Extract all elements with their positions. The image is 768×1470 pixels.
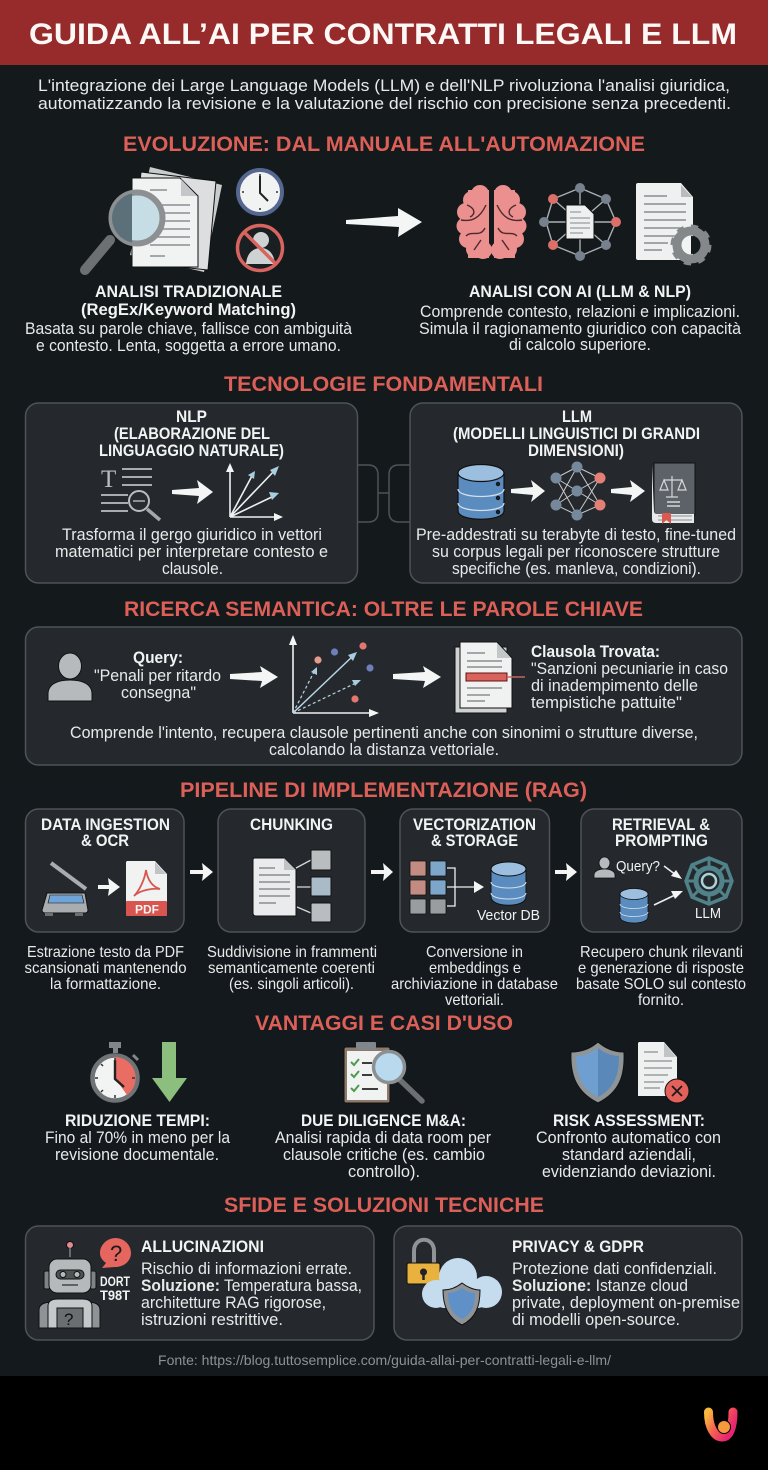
heading: sfide: SFIDE E SOLUZIONI TECNICHE	[224, 1193, 544, 1217]
text block: risk assessment: Confronto automatico con	[536, 1128, 721, 1147]
pipeline step: data ingestion	[26, 809, 184, 932]
arrow	[172, 480, 213, 504]
NLP description	[55, 525, 328, 578]
description: step 4: basate SOLO sul contesto	[576, 976, 746, 993]
privacy text	[512, 1259, 740, 1329]
LLM title	[453, 408, 700, 460]
clause text: di inadempimento delle	[531, 676, 698, 695]
arrow	[98, 878, 120, 896]
text block: riduzione tempi: RIDUZIONE TEMPI:	[65, 1112, 210, 1130]
text block: analisi tradizionale: e contesto. Lenta, soggetta a errore umano.	[36, 336, 341, 355]
step title	[413, 816, 536, 850]
description: step 3: archiviazione in database	[391, 976, 558, 993]
allucinazioni title: ALLUCINAZIONI	[141, 1238, 264, 1256]
footer band	[0, 1376, 768, 1470]
icon: text with magnifier: T	[101, 466, 116, 493]
icon: document with error	[638, 1042, 689, 1103]
text block: risk assessment: evidenziando deviazioni.	[542, 1162, 716, 1181]
step title: DATA INGESTION	[41, 816, 170, 834]
icon: vector axes	[226, 463, 283, 521]
description: step 4: fornito.	[638, 992, 684, 1009]
heading: ricerca semantica: RICERCA SEMANTICA: OLTRE LE PAROLE CHIAVE	[124, 597, 643, 621]
icon: scanner	[42, 863, 88, 916]
NLP title	[99, 408, 284, 460]
chart: vector space	[289, 635, 379, 717]
icon: question bubble	[100, 1238, 131, 1268]
pipeline step: retrieval	[581, 809, 742, 932]
LLM title: DIMENSIONI)	[528, 442, 624, 460]
NLP title: NLP	[176, 408, 207, 426]
logo	[708, 1412, 733, 1437]
step title	[41, 816, 170, 850]
description: step 1: Estrazione testo da PDF	[27, 944, 184, 961]
query text: "Penali per ritardo	[94, 666, 221, 685]
text block: analisi con AI: Comprende contesto, relazioni e implicazioni.	[420, 302, 740, 321]
text block: risk assessment: RISK ASSESSMENT:	[553, 1112, 705, 1130]
text block: analisi tradizionale: Basata su parole chiave, fallisce con ambiguità	[25, 319, 352, 338]
icon: PDF file: PDF	[135, 904, 159, 916]
panel: allucinazioni	[26, 1226, 374, 1340]
source line: Fonte: https://blog.tuttosemplice.com/guida-allai-per-contratti-legali-e-llm/	[158, 1352, 611, 1368]
text block: analisi con AI: ANALISI CON AI (LLM & NLP)	[469, 283, 691, 301]
panel: ricerca semantica	[26, 627, 742, 765]
LLM title: LLM	[562, 408, 592, 426]
icon: database	[458, 464, 504, 519]
icon: law book	[652, 463, 695, 524]
NLP title: (ELABORAZIONE DEL	[114, 425, 270, 443]
icon: document network	[539, 183, 621, 261]
heading: vantaggi: VANTAGGI E CASI D'USO	[255, 1011, 513, 1035]
LLM description: specifiche (es. manleva, condizioni).	[452, 559, 701, 578]
icon: padlock	[407, 1240, 440, 1284]
NLP description: clausole.	[162, 559, 223, 578]
header band	[0, 0, 768, 65]
icon: shield	[571, 1042, 624, 1103]
connector between panels	[357, 465, 410, 522]
text block: due diligence: Analisi rapida di data room per	[275, 1128, 491, 1147]
description: step 3: vettoriali.	[445, 992, 504, 1009]
label: LLM: LLM	[695, 906, 721, 922]
garbled label: T98T	[100, 1288, 131, 1303]
icon: robot: ?	[64, 1310, 73, 1329]
text block: analisi con AI	[419, 283, 742, 354]
connector arrow	[447, 868, 484, 906]
LLM description	[416, 525, 736, 578]
icon: brain	[456, 185, 526, 259]
label: vector db: Vector DB	[477, 907, 540, 924]
icon: embedding grid	[410, 861, 446, 914]
text block: riduzione tempi: revisione documentale.	[55, 1145, 219, 1164]
title: GUIDA ALL’AI PER CONTRATTI LEGALI E LLM	[29, 18, 737, 51]
text block: due diligence	[275, 1112, 491, 1181]
description: step 2	[207, 944, 377, 993]
arrow	[511, 480, 545, 502]
privacy text: private, deployment on-premise	[512, 1293, 740, 1312]
description: step 4	[576, 944, 746, 1009]
heading: evoluzione: EVOLUZIONE: DAL MANUALE ALL'AUTOMAZIONE	[123, 132, 645, 156]
arrow	[393, 666, 441, 688]
NLP description: Trasforma il gergo giuridico in vettori	[62, 525, 322, 544]
text block: due diligence: clausole critiche (es. cambio	[283, 1145, 485, 1164]
text block: analisi con AI: di calcolo superiore.	[509, 335, 651, 354]
icon: vector database	[491, 862, 526, 905]
icon: document with gear	[636, 183, 709, 263]
icon: clipboard with magnifier	[344, 1042, 422, 1103]
description: step 4: Recupero chunk rilevanti	[580, 944, 743, 961]
description: step 1: la formattazione.	[50, 976, 161, 993]
clause text: Clausola Trovata:	[531, 643, 660, 661]
intro text: L'integrazione dei Large Language Models (LLM) e dell'NLP rivoluziona l'analisi giuridica,	[38, 76, 730, 95]
icon: small database	[620, 888, 648, 923]
icon: LLM network	[686, 858, 732, 904]
heading: pipeline: PIPELINE DI IMPLEMENTAZIONE (RAG)	[180, 778, 587, 802]
clause text	[531, 643, 728, 712]
panel: LLM	[410, 403, 742, 583]
privacy text: di modelli open-source.	[512, 1310, 680, 1329]
step title: RETRIEVAL &	[612, 816, 710, 834]
privacy text: Soluzione: Istanze cloud	[512, 1276, 688, 1295]
text block: riduzione tempi: Fino al 70% in meno per la	[45, 1128, 230, 1147]
step title: CHUNKING	[250, 816, 333, 834]
garbled label: DORT	[100, 1274, 131, 1289]
step title: PROMPTING	[615, 832, 708, 850]
icon: robot	[39, 1242, 100, 1329]
caption: Comprende l'intento, recupera clausole pertinenti anche con sinonimi o strutture diverse,	[70, 723, 698, 742]
step title: & OCR	[81, 832, 129, 850]
icon: clock	[238, 170, 282, 214]
icon: document split into chunks	[253, 850, 331, 922]
icon: no person	[238, 226, 282, 270]
description: step 2: Suddivisione in frammenti	[207, 944, 377, 961]
arrow	[555, 863, 577, 881]
icon: cloud with shield	[422, 1258, 502, 1325]
garbled label	[100, 1274, 131, 1303]
text block: risk assessment	[536, 1112, 721, 1181]
icon: green down arrow	[152, 1042, 187, 1102]
text block: riduzione tempi	[45, 1112, 230, 1164]
description: step 1: scansionati mantenendo	[24, 960, 187, 977]
pipeline step: vectorization	[400, 809, 550, 932]
text block: due diligence: controllo).	[348, 1162, 420, 1181]
clause text: tempistiche pattuite"	[531, 693, 682, 712]
icon: text with magnifier	[101, 466, 160, 520]
description: step 4: e generazione di risposte	[578, 960, 744, 977]
arrow	[664, 866, 682, 879]
icon: question bubble: ?	[110, 1241, 122, 1266]
arrow	[654, 891, 683, 905]
LLM description: Pre-addestrati su terabyte di testo, fine-tuned	[416, 525, 736, 544]
arrow	[611, 480, 645, 502]
arrow	[190, 863, 213, 881]
intro text	[38, 76, 731, 113]
query text: consegna"	[121, 683, 196, 702]
icon: documents with magnifier	[85, 167, 222, 272]
caption	[70, 723, 698, 759]
step title: & STORAGE	[431, 832, 518, 850]
allucinazioni text	[141, 1259, 362, 1329]
privacy text: Protezione dati confidenziali.	[512, 1259, 717, 1278]
LLM title: (MODELLI LINGUISTICI DI GRANDI	[453, 425, 700, 443]
step title: VECTORIZATION	[413, 816, 536, 834]
allucinazioni text: Rischio di informazioni errate.	[141, 1259, 352, 1278]
icon: stopwatch	[92, 1042, 138, 1100]
description: step 2: (es. singoli articoli).	[229, 976, 354, 993]
NLP title: LINGUAGGIO NATURALE)	[99, 442, 284, 460]
query text	[94, 649, 221, 702]
icon: PDF file	[126, 861, 167, 916]
description: step 3	[391, 944, 558, 1009]
query text: Query:	[133, 649, 183, 667]
description: step 3: Conversione in	[426, 944, 523, 961]
arrow	[230, 666, 278, 688]
allucinazioni text: Soluzione: Temperatura bassa,	[141, 1276, 362, 1295]
text block: risk assessment: standard aziendali,	[562, 1145, 696, 1164]
heading: tecnologie: TECNOLOGIE FONDAMENTALI	[224, 372, 543, 396]
description: step 1	[24, 944, 187, 993]
icon: neural network	[550, 462, 606, 520]
panel: privacy	[394, 1226, 742, 1340]
icon: small person	[594, 857, 615, 878]
caption: calcolando la distanza vettoriale.	[269, 740, 499, 759]
privacy title: PRIVACY & GDPR	[512, 1238, 644, 1256]
text block: due diligence: DUE DILIGENCE M&A:	[301, 1112, 466, 1130]
allucinazioni text: istruzioni restrittive.	[141, 1310, 283, 1329]
clause text: "Sanzioni pecuniarie in caso	[531, 659, 728, 678]
panel: NLP	[26, 403, 358, 583]
arrow: manual to automation	[346, 208, 422, 237]
LLM description: su corpus legali per riconoscere strutture	[432, 542, 720, 561]
icon: document with highlight	[455, 642, 525, 713]
pipeline step: chunking	[218, 809, 365, 932]
label: query: Query?	[616, 859, 660, 875]
icon: person	[48, 653, 92, 701]
text block: analisi tradizionale	[25, 283, 352, 355]
text block: analisi tradizionale: ANALISI TRADIZIONALE	[95, 283, 282, 301]
text block: analisi con AI: Simula il ragionamento giuridico con capacità	[419, 319, 742, 338]
description: step 3: embeddings e	[429, 960, 521, 977]
step title	[612, 816, 710, 850]
NLP description: matematici per interpretare contesto e	[55, 542, 328, 561]
description: step 2: semanticamente coerenti	[208, 960, 375, 977]
text block: analisi tradizionale: (RegEx/Keyword Matching)	[81, 301, 296, 319]
allucinazioni text: architetture RAG rigorose,	[141, 1293, 326, 1312]
intro text: automatizzando la revisione e la valutazione del rischio con precisione senza precedenti.	[38, 94, 731, 113]
arrow	[371, 863, 393, 881]
